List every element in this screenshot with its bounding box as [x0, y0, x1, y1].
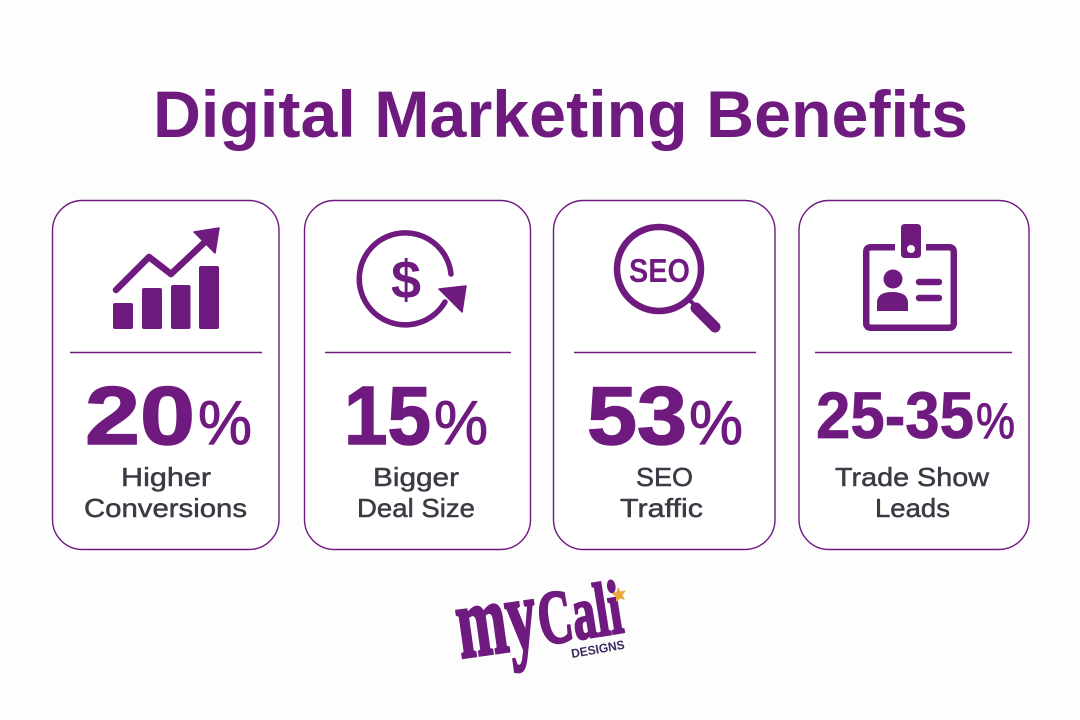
icon: star [612, 587, 626, 602]
label: bigger deal size: Deal Size [357, 493, 475, 523]
panel: higher conversions [52, 200, 279, 550]
label: higher conversions [84, 462, 247, 523]
stat: 20%: 20 [85, 369, 195, 462]
label: seo traffic [620, 462, 703, 523]
stat: 15% [344, 369, 488, 462]
panel: bigger deal size [304, 200, 530, 550]
label: seo traffic: Traffic [620, 493, 703, 523]
label: bigger deal size: Bigger [373, 462, 459, 492]
panel: trade show leads [799, 200, 1029, 550]
label: bigger deal size [357, 462, 475, 523]
logo: mycali designs: my [448, 558, 543, 681]
stat: 20%: % [198, 389, 252, 458]
panel: seo traffic [554, 200, 775, 550]
logo: mycali designs: DESIGNS [570, 638, 626, 661]
icon: dollar cycle [359, 233, 466, 325]
stat: 25-35%: 25-35 [816, 378, 974, 452]
label: higher conversions: Conversions [84, 493, 247, 523]
stat: 53%: 53 [587, 369, 687, 462]
icon: growth bar chart [113, 228, 219, 329]
stat: 15%: % [434, 389, 488, 458]
stat: 25-35%: % [976, 393, 1015, 449]
label: trade show leads [835, 462, 989, 523]
title: Digital Marketing Benefits [153, 77, 968, 151]
stat: 53% [587, 369, 743, 462]
label: trade show leads: Leads [875, 493, 950, 523]
icon: dollar cycle: $ [391, 250, 421, 310]
stat: 20% [85, 369, 252, 462]
label: seo traffic: SEO [636, 462, 693, 492]
stat: 15%: 15 [344, 369, 431, 462]
stat: 53%: % [689, 389, 743, 458]
label: higher conversions: Higher [121, 462, 211, 492]
icon: seo magnifier [617, 227, 715, 327]
label: trade show leads: Trade Show [835, 462, 989, 492]
logo: mycali designs: Cali [532, 566, 628, 662]
icon: seo magnifier: SEO [629, 252, 690, 289]
icon: id badge [866, 224, 954, 328]
